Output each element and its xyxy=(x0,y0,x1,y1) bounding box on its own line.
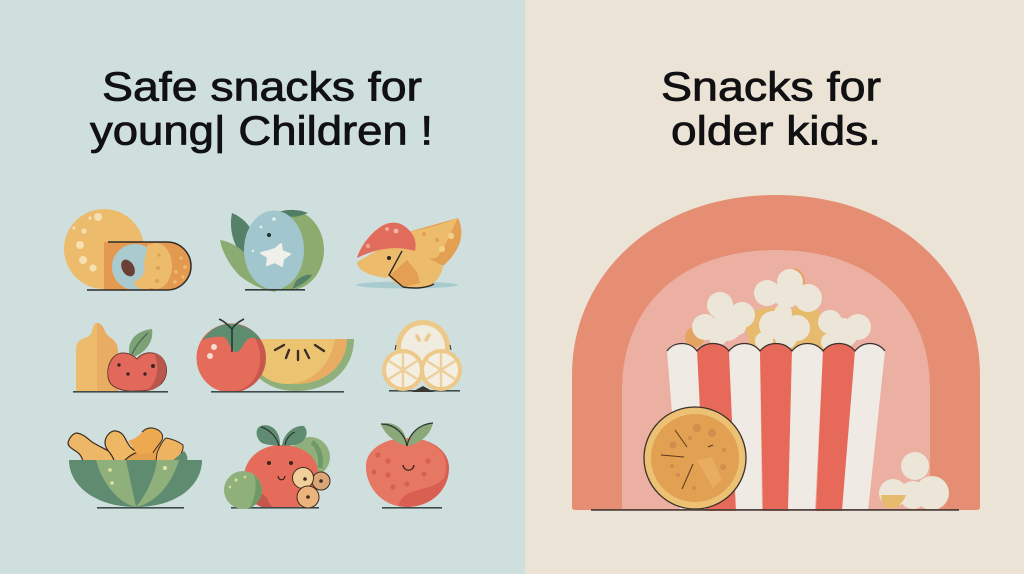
icon: salad bowl with snacks xyxy=(68,428,202,509)
popcorn box with stripes xyxy=(667,344,885,511)
icon: smiling red fruit xyxy=(366,423,449,509)
title: snacks for older kids: older kids. xyxy=(671,108,881,154)
small popcorn pile xyxy=(879,452,949,510)
icon: citrus slices xyxy=(382,320,462,392)
icon: orange circle and capsule xyxy=(64,209,191,290)
icon: red and orange wedges xyxy=(356,218,461,288)
icon: smiling apple with berries xyxy=(224,425,330,509)
icon: blue green melon with star xyxy=(220,210,324,292)
title: snacks for older kids: Snacks for xyxy=(661,64,881,110)
icon: tomato and melon slice xyxy=(196,319,354,393)
panel: older kids background xyxy=(525,0,1024,574)
ground line xyxy=(591,509,959,511)
arch background xyxy=(572,195,980,510)
panel: young children background xyxy=(0,0,525,574)
icon: bottle shape and apple xyxy=(73,323,168,393)
title: safe snacks for young children: Safe snacks for xyxy=(102,64,422,110)
round cracker xyxy=(644,407,746,509)
title: safe snacks for young children xyxy=(90,64,433,154)
title: snacks for older kids xyxy=(661,64,881,154)
popcorn kernels pile xyxy=(685,268,871,353)
title: safe snacks for young children: young| Children ! xyxy=(90,108,433,154)
